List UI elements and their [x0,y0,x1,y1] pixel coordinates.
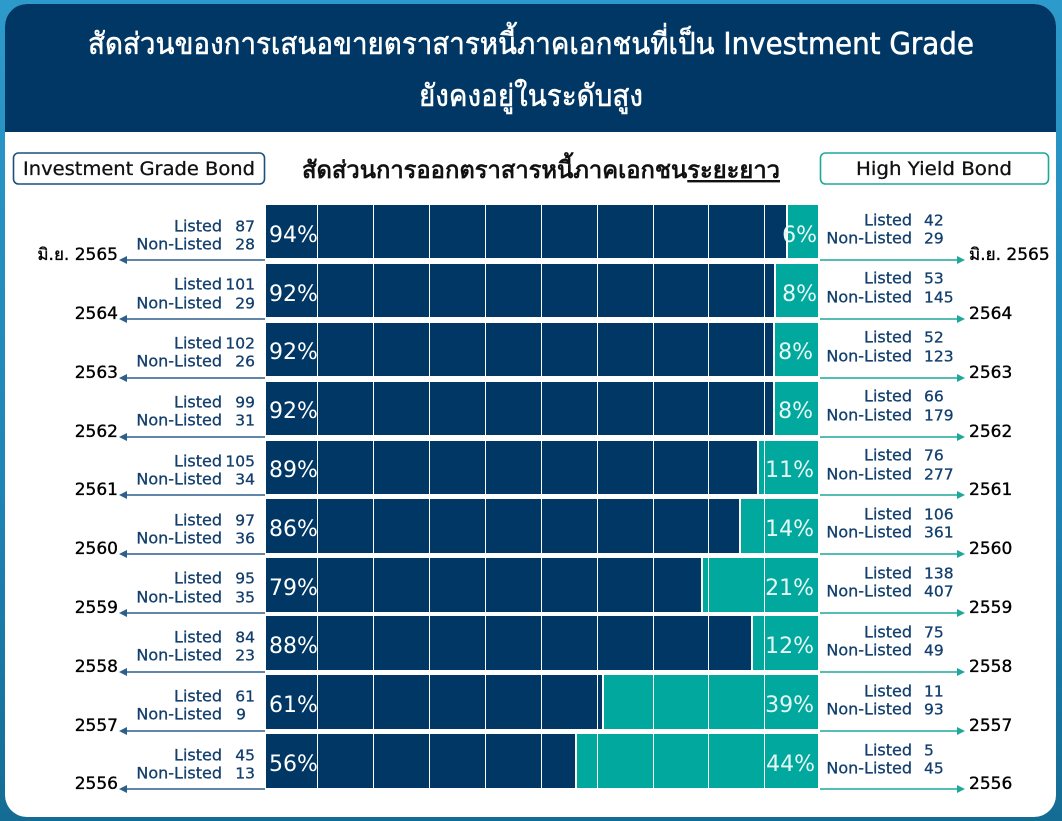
left entry: 2564: 29 [235,294,255,312]
bar row: 2564: 8% [782,282,817,307]
bar row: 2557: 39% [765,693,814,718]
legend box: High Yield Bond: High Yield Bond [856,158,1012,180]
left entry: 2563: Non-Listed [136,352,222,370]
left entry: 2561: 34 [235,470,255,488]
bar row: 2560: 14% [765,517,814,542]
right entry: 2557: 11 [924,682,944,700]
bar row: 2557: 61% [269,693,318,718]
right entry: 2561: Listed [864,446,912,464]
legend box: High Yield Bond [820,153,1048,184]
left entry: 2562: Listed [174,392,222,412]
left entry: 2559 [75,568,265,618]
bar row: 2560: 86% [269,517,318,542]
right entry: 2558: Non-Listed [826,640,912,660]
title: สัดส่วนของการเสนอขายตราสารหนี้ภาคเอกชนที่เป็น Investment Grade [88,22,974,62]
right entry: 2556: Non-Listed [826,758,912,778]
left entry: 2561: 2561 [75,480,118,500]
left entry: 2556: 45 [235,746,255,764]
right entry: 2558: 75 [924,624,944,642]
right entry: มิ.ย. 2565 [820,210,1050,265]
bar row: 2556 [266,734,818,788]
right entry: 2558: 49 [924,642,944,660]
right entry: 2564: Listed [864,268,912,288]
right entry: 2558: Listed [864,622,912,642]
bar row: 2564: 92% [269,282,318,307]
right entry: 2563: Listed [864,328,912,346]
bar row: 2558: 12% [765,634,814,659]
right entry: 2557: 2557 [969,716,1012,736]
left entry: 2558: 23 [235,646,255,664]
bar row: 2558: 88% [269,634,318,659]
left entry: 2562: 31 [235,412,255,430]
stacked bar chart [266,205,818,788]
title: ยังคงอยู่ในระดับสูง [419,79,643,114]
bar row: 2563: 92% [269,340,318,365]
right entry: 2562: 2562 [969,422,1012,442]
right entry: 2562 [820,386,1012,442]
left entry: 2556: 2556 [75,774,118,794]
right entry: 2560: Non-Listed [826,522,912,542]
left entry: 2556: Listed [174,746,222,764]
left entry: มิ.ย. 2565: Listed [174,216,222,236]
right entry: มิ.ย. 2565: 29 [924,230,944,248]
right entry: 2562: Non-Listed [826,406,912,424]
left entry: 2557: 2557 [75,716,118,736]
right entry: 2562: 66 [924,388,944,406]
left entry: มิ.ย. 2565: 28 [235,236,255,254]
left column: Investment Grade counts [37,216,265,794]
right entry: มิ.ย. 2565: 42 [924,212,944,230]
left entry: มิ.ย. 2565: 87 [235,218,255,236]
bar row: 2559: 21% [765,576,814,601]
left entry: 2563: Listed [174,334,222,352]
bar row: 2563: 8% [778,340,813,365]
legend box: Investment Grade Bond: Investment Grade Bond [23,158,255,180]
left entry: 2562: 2562 [75,422,118,442]
right entry: 2556 [820,740,1012,794]
bar row: 2560 [266,499,818,553]
left entry: 2559: 2559 [75,598,118,618]
right entry: 2564: 145 [924,288,954,306]
right entry: 2556: 5 [924,742,934,760]
bar row: 2561 [266,441,818,494]
left entry: 2564: 2564 [75,304,118,324]
left entry: 2559: Non-Listed [136,588,222,606]
left entry: 2559: 95 [235,570,255,588]
bar row: 2558 [266,616,818,670]
bar row: มิ.ย. 2565: 94% [269,223,318,248]
left entry: มิ.ย. 2565: มิ.ย. 2565 [37,245,118,265]
right entry: 2556: Listed [864,740,912,760]
bar row: 2564 [266,264,818,317]
left entry: 2564: Non-Listed [136,294,222,312]
right entry: 2562: 179 [924,406,954,424]
right entry: มิ.ย. 2565: มิ.ย. 2565 [969,245,1050,265]
right entry: 2561: 2561 [969,480,1012,500]
left entry: 2556 [75,746,265,794]
right entry: 2558 [820,622,1012,677]
left entry: 2562 [75,392,265,442]
left entry: 2564: 101 [225,276,255,294]
left entry: 2560: 36 [235,530,255,548]
left entry: 2563: 2563 [75,363,118,383]
bar row: มิ.ย. 2565: 6% [782,223,817,248]
right entry: 2559: Listed [864,564,912,582]
bar row: 2559 [266,558,818,612]
legend box: Investment Grade Bond [14,153,264,184]
bar row: 2562: 92% [269,399,318,424]
right column: High Yield counts [820,210,1050,794]
left entry: 2558: Non-Listed [136,646,222,664]
bar row: 2562 [266,382,818,435]
left entry: 2558: Listed [174,628,222,646]
left entry: 2557 [75,686,265,736]
left entry: 2562: Non-Listed [136,410,222,430]
right entry: 2564 [820,268,1012,324]
right entry: 2563: 52 [924,328,944,346]
bar row: 2563 [266,323,818,376]
left entry: 2556: 13 [235,764,255,782]
right entry: 2560 [820,504,1012,559]
right entry: 2559: 407 [924,582,954,600]
right entry: 2559 [820,564,1012,618]
left entry: 2558: 2558 [75,657,118,677]
bar row: 2556: 44% [766,752,815,777]
left entry: 2563: 26 [235,352,255,370]
left entry: 2559: Listed [174,568,222,588]
left entry: 2564: Listed [174,274,222,294]
header band [5,4,1056,132]
bar row: 2561: 11% [765,458,814,483]
left entry: 2560: 97 [235,512,255,530]
left entry: 2560: Listed [174,510,222,530]
left entry: 2561: Listed [174,452,222,470]
bar row: มิ.ย. 2565 [266,205,818,258]
left entry: 2557: Listed [174,686,222,706]
right entry: 2557: Listed [864,682,912,700]
right entry: 2561: Non-Listed [826,464,912,484]
left entry: 2560: 2560 [75,539,118,559]
left entry: มิ.ย. 2565: Non-Listed [136,234,222,254]
right entry: 2563: 2563 [969,363,1012,383]
right entry: มิ.ย. 2565: Listed [864,210,912,230]
left entry: 2562: 99 [235,394,255,412]
left entry: 2556: Non-Listed [136,764,222,782]
left entry: 2557: 61 [235,688,255,706]
left entry: 2564 [75,274,265,324]
right entry: 2563 [820,328,1012,383]
left entry: 2558: 84 [235,628,255,646]
right entry: 2558: 2558 [969,657,1012,677]
bar row: 2556: 56% [269,752,318,777]
left entry: 2557: Non-Listed [136,704,222,724]
right entry: 2557: Non-Listed [826,700,912,718]
right entry: 2562: Listed [864,386,912,406]
bar row: 2559: 79% [269,576,318,601]
right entry: 2564: Non-Listed [826,288,912,306]
left entry: มิ.ย. 2565 [37,216,265,265]
left entry: 2560 [75,510,265,559]
bar row: 2562: 8% [778,399,813,424]
right entry: 2561: 277 [924,466,954,484]
right entry: 2564: 53 [924,270,944,288]
right entry: 2557: 93 [924,700,944,718]
right entry: 2556: 2556 [969,774,1012,794]
right entry: มิ.ย. 2565: Non-Listed [826,228,912,248]
right entry: 2556: 45 [924,760,944,778]
bar row: 2561: 89% [269,458,318,483]
left entry: 2560: Non-Listed [136,528,222,548]
right entry: 2561: 76 [924,446,944,464]
title [88,22,974,114]
left entry: 2561: Non-Listed [136,470,222,488]
right entry: 2563: 123 [924,348,954,366]
right entry: 2559: 138 [924,564,954,582]
right entry: 2559: Non-Listed [826,582,912,600]
left entry: 2561: 105 [225,452,255,470]
right entry: 2560: 2560 [969,539,1012,559]
right entry: 2563: Non-Listed [826,346,912,366]
left entry: 2559: 35 [235,588,255,606]
right entry: 2557 [820,682,1012,736]
right entry: 2559: 2559 [969,598,1012,618]
left entry: 2563 [75,334,265,383]
right entry: 2561 [820,446,1012,500]
left entry: 2561 [75,452,265,500]
left entry: 2563: 102 [225,334,255,352]
right entry: 2560: Listed [864,504,912,524]
chart subtitle: สัดส่วนการออกตราสารหนี้ภาคเอกชนระยะยาว [302,151,780,184]
left entry: 2558 [75,628,265,677]
right entry: 2564: 2564 [969,304,1012,324]
bar row: 2557 [266,675,818,729]
left entry: 2557: 9 [236,706,246,724]
right entry: 2560: 106 [924,506,954,524]
right entry: 2560: 361 [924,524,954,542]
